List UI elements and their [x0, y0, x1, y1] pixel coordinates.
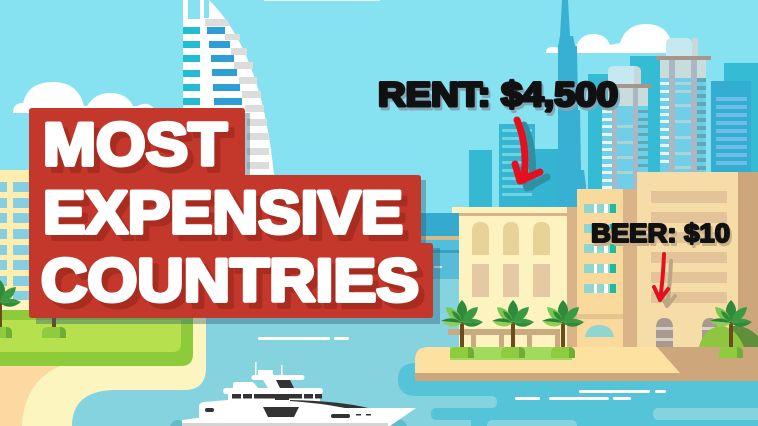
- cloud: right: [546, 24, 690, 53]
- title text: EXPENSIVE: [43, 179, 403, 246]
- building: Burj Khalifa: [558, 0, 586, 209]
- water: dark foreground bay: [170, 363, 758, 426]
- water: left and centre: [206, 240, 758, 426]
- banner: red stepped panel: [29, 108, 433, 318]
- beer label: BEER: $10: [593, 221, 732, 251]
- island: promenade: [415, 347, 758, 381]
- building: beige tower right: [637, 172, 758, 348]
- bush: [699, 326, 758, 347]
- cloud: left: [13, 82, 160, 113]
- palm trees on promenade: [441, 300, 752, 358]
- beach and left shore: [0, 300, 206, 426]
- title text: COUNTRIES: [41, 247, 419, 314]
- rent label: RENT: $4,500: [378, 76, 618, 114]
- tower with window stripes: [499, 124, 535, 209]
- title text shadow: COUNTRIES: [47, 253, 425, 320]
- building: Burj Al Arab hotel: [183, 0, 274, 175]
- water ripples: [258, 337, 666, 400]
- title text shadow: [47, 117, 425, 320]
- skyline: background towers: [469, 56, 758, 210]
- title text: [41, 111, 419, 314]
- skyscraper: tower two: [656, 38, 711, 174]
- thin white strip at top: [264, 0, 380, 1]
- building: left hotel: [0, 170, 40, 310]
- yacht: [182, 362, 416, 426]
- distant shore and bridge: [421, 213, 461, 279]
- lawn: [0, 310, 193, 366]
- title text shadow: EXPENSIVE: [49, 185, 409, 252]
- title text shadow: MOST: [49, 117, 233, 184]
- palm trees on lawn: [0, 280, 75, 338]
- rent label: RENT: $4,500: [380, 79, 620, 117]
- title text: MOST: [43, 111, 227, 178]
- arrow: rent: [515, 120, 547, 188]
- skyscraper: tower one: [600, 66, 652, 196]
- arrow: beer: [654, 254, 675, 306]
- banner shadow: [36, 113, 440, 324]
- beer label: BEER: $10: [591, 218, 730, 248]
- title banner: [29, 108, 440, 324]
- building: cream hotel: [448, 207, 577, 347]
- building: middle tower: [577, 189, 637, 347]
